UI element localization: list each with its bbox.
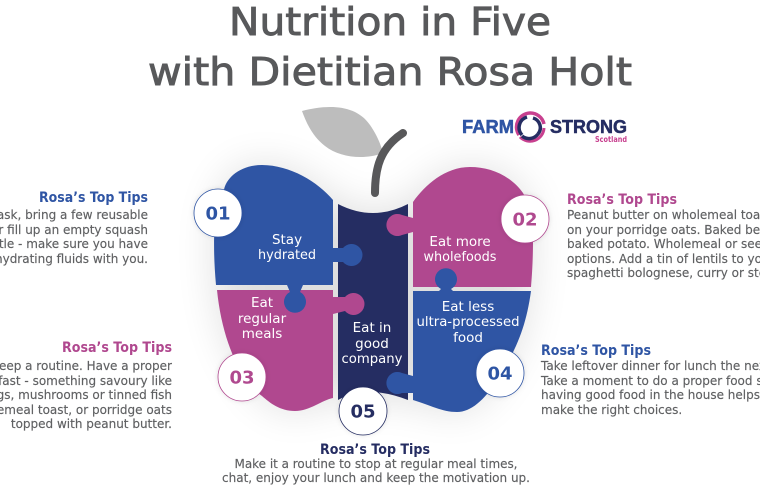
badge 04: 04 <box>487 364 513 384</box>
puzzle piece 01: stay hydrated: hydrated <box>258 247 316 263</box>
puzzle piece 02: eat more wholefoods: Eat more <box>429 234 491 250</box>
tips 05: Rosa’s Top Tips <box>320 442 430 458</box>
apple puzzle <box>214 165 533 412</box>
puzzle piece 04: eat less ultra-processed food <box>386 268 531 412</box>
puzzle piece 01: stay hydrated: Stay <box>272 232 302 248</box>
tips 02: Rosa’s Top Tips <box>567 192 677 208</box>
tips 04: Rosa’s Top Tips <box>541 343 651 359</box>
logo: Farmstrong Scotland: Scotland <box>595 135 627 144</box>
icon: apple stem <box>375 133 403 193</box>
badge 02 <box>501 195 549 243</box>
tips 03 <box>0 340 172 431</box>
tips 01: Rosa’s Top Tips <box>39 190 148 206</box>
tips 05 <box>222 442 530 485</box>
badge 01: 01 <box>205 204 231 224</box>
puzzle piece 01: stay hydrated <box>214 165 362 313</box>
puzzle piece 03: eat regular meals: Eat <box>251 295 273 311</box>
tips 01 <box>0 190 148 266</box>
badge 05 <box>339 387 387 435</box>
puzzle piece 05: eat in good company <box>338 204 408 400</box>
logo: Farmstrong Scotland: STRONG <box>550 117 627 137</box>
puzzle piece 03: eat regular meals: meals <box>242 326 282 342</box>
puzzle piece 02: eat more wholefoods: wholefoods <box>424 249 496 265</box>
badge 03: 03 <box>229 368 255 388</box>
badge 05: 05 <box>350 402 376 422</box>
title <box>148 0 632 95</box>
logo: Farmstrong Scotland <box>462 113 627 144</box>
puzzle piece 04: eat less ultra-processed food: Eat less <box>442 299 494 315</box>
title: with Dietitian Rosa Holt <box>148 50 632 95</box>
tips 03: Rosa’s Top Tips <box>62 340 172 356</box>
soft shadow behind apple <box>214 165 533 412</box>
badge 02: 02 <box>512 210 538 230</box>
puzzle piece 05: eat in good company: good <box>355 336 389 352</box>
badge 01 <box>194 189 242 237</box>
puzzle piece 03: eat regular meals <box>217 290 364 411</box>
icon: apple leaf <box>302 107 383 157</box>
title: Nutrition in Five <box>229 0 551 45</box>
tips 03: topped with peanut butter. <box>11 417 172 431</box>
tips 02 <box>567 192 760 280</box>
tips 04: make the right choices. <box>541 403 682 417</box>
puzzle piece 05: eat in good company: Eat in <box>353 320 391 336</box>
tips 05: Make it a routine to stop at regular meal times, <box>234 457 518 471</box>
puzzle piece 04: eat less ultra-processed food: ultra-processed <box>416 314 520 330</box>
badge 04 <box>476 349 524 397</box>
tips 05: chat, enjoy your lunch and keep the motivation up. <box>222 471 530 485</box>
puzzle piece 04: eat less ultra-processed food: food <box>453 330 483 346</box>
puzzle piece 05: eat in good company: company <box>342 351 402 367</box>
tips 04 <box>540 343 760 417</box>
puzzle piece 02: eat more wholefoods <box>386 167 533 287</box>
logo: Farmstrong Scotland: FARM <box>462 117 514 137</box>
badge 03 <box>218 353 266 401</box>
puzzle piece 03: eat regular meals: regular <box>238 311 287 327</box>
